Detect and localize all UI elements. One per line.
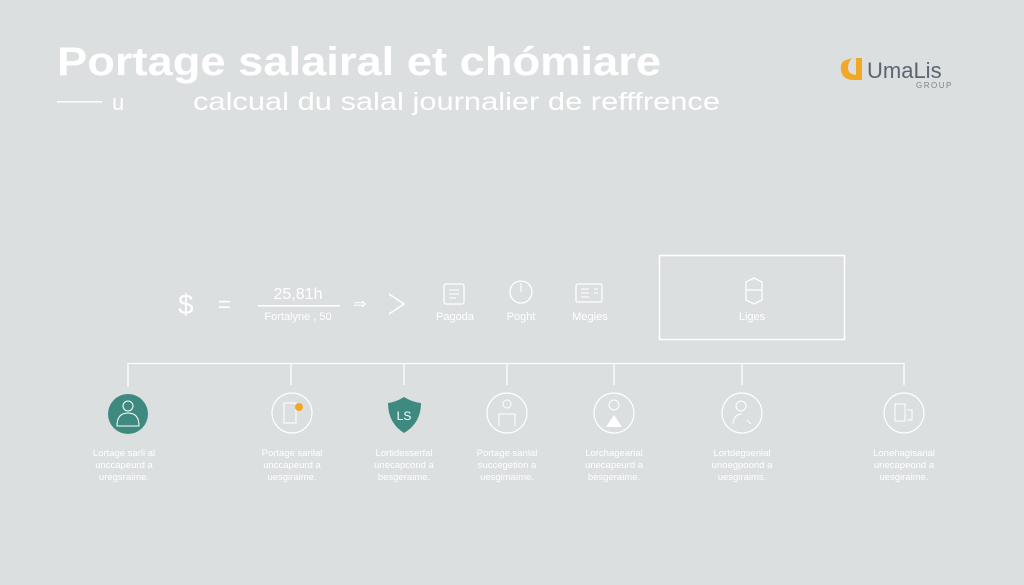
step 5 [585, 393, 644, 483]
item: Megies [572, 284, 608, 323]
step 3: shield [374, 397, 435, 483]
step 3: shield: unecapcond a [374, 460, 435, 471]
fraction: 25,81h [274, 286, 322, 303]
logo: UmaLis group [841, 58, 953, 90]
arrow: ⇒ [353, 296, 366, 313]
step 6: uesgiraims. [718, 472, 766, 483]
item: Megies: Megies [572, 311, 608, 323]
step 5: unecapeurd a [585, 460, 644, 471]
step 1: unccapeurd a [95, 460, 153, 471]
item: Pagoda [436, 284, 475, 323]
step 3: shield: besgeraime. [378, 472, 430, 483]
step 1: Lortage sarli al [93, 448, 155, 459]
fraction [258, 286, 340, 323]
step 1: uregsraime. [99, 472, 149, 483]
step 4 [477, 393, 537, 483]
box: Liges [660, 256, 844, 340]
step 6: unoegpoond a [712, 460, 773, 471]
step 2 [262, 393, 322, 483]
fraction: Fortalyne , 50 [264, 311, 332, 323]
item: Poght: Poght [507, 311, 535, 323]
icon: chevron [389, 294, 404, 314]
title: Portage salairal et chómiare [57, 40, 661, 84]
subtitle: calcual du salal journalier de refffrence [193, 88, 720, 116]
step 5: besgeraime. [588, 472, 640, 483]
logo: UmaLis group: UmaLis [867, 58, 942, 83]
item: Pagoda: Pagoda [436, 311, 475, 323]
equals: = [218, 292, 231, 317]
step 3: shield: LS [397, 409, 411, 423]
timeline [128, 363, 904, 387]
step 4: succegetion a [478, 460, 537, 471]
step 5: Lorchagearial [585, 448, 643, 459]
step 7 [873, 393, 935, 483]
formula row [178, 281, 608, 323]
step 7: uesgiraime. [879, 472, 929, 483]
step 3: shield: Lortidesserfal [375, 448, 433, 459]
step 4: Portage sanlal [477, 448, 537, 459]
step 6 [712, 393, 773, 483]
subtitle: u [112, 90, 124, 115]
icon: dollar: $ [178, 289, 194, 320]
step 7: Lonehagisarial [873, 448, 935, 459]
item: Poght [507, 281, 535, 323]
box: Liges: Liges [739, 311, 766, 323]
step 4: uesgimaime. [480, 472, 534, 483]
step 7: unecapeond a [874, 460, 935, 471]
step 2: unccapeurd a [263, 460, 321, 471]
step 1 [93, 394, 155, 483]
step 2: uesgiraime. [267, 472, 317, 483]
step 2: Portage sarilal [262, 448, 322, 459]
subtitle [57, 88, 720, 116]
logo: UmaLis group: GROUP [916, 81, 953, 90]
step 6: Lortdegsenial [713, 448, 771, 459]
